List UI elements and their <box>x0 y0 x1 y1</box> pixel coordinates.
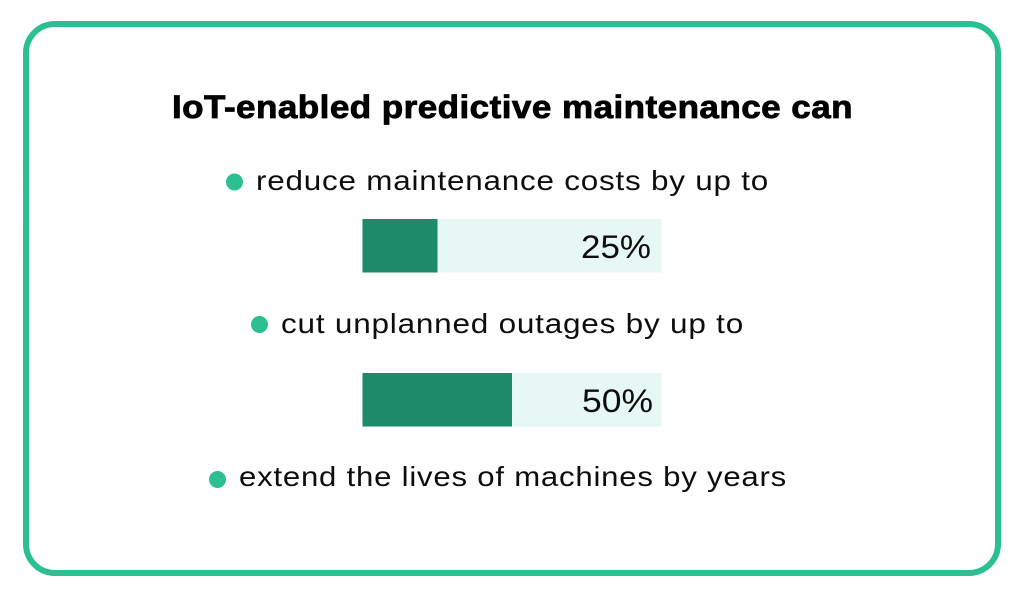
icon: bullet <box>209 471 226 488</box>
list item: reduce maintenance costs <box>226 165 769 196</box>
bar track <box>362 219 662 272</box>
bar track <box>362 373 662 426</box>
list item: extend the lives of machines <box>209 461 787 492</box>
heading: IoT-enabled predictive maintenance can <box>172 89 853 125</box>
bar chart: 50 percent <box>362 373 662 426</box>
value label: 25% <box>581 229 651 265</box>
icon: bullet <box>251 316 268 333</box>
value label: 50% <box>582 383 653 419</box>
text: cut unplanned outages: cut unplanned outages by up to <box>281 308 744 339</box>
icon: bullet <box>226 174 243 190</box>
bar chart: 25 percent <box>362 219 662 272</box>
list item: cut unplanned outages <box>251 308 744 339</box>
text: extend the lives of machines: extend the lives of machines by years <box>239 461 787 492</box>
bar fill <box>362 373 512 426</box>
text: reduce maintenance costs: reduce maintenance costs by up to <box>256 165 769 196</box>
bar fill <box>362 219 438 272</box>
